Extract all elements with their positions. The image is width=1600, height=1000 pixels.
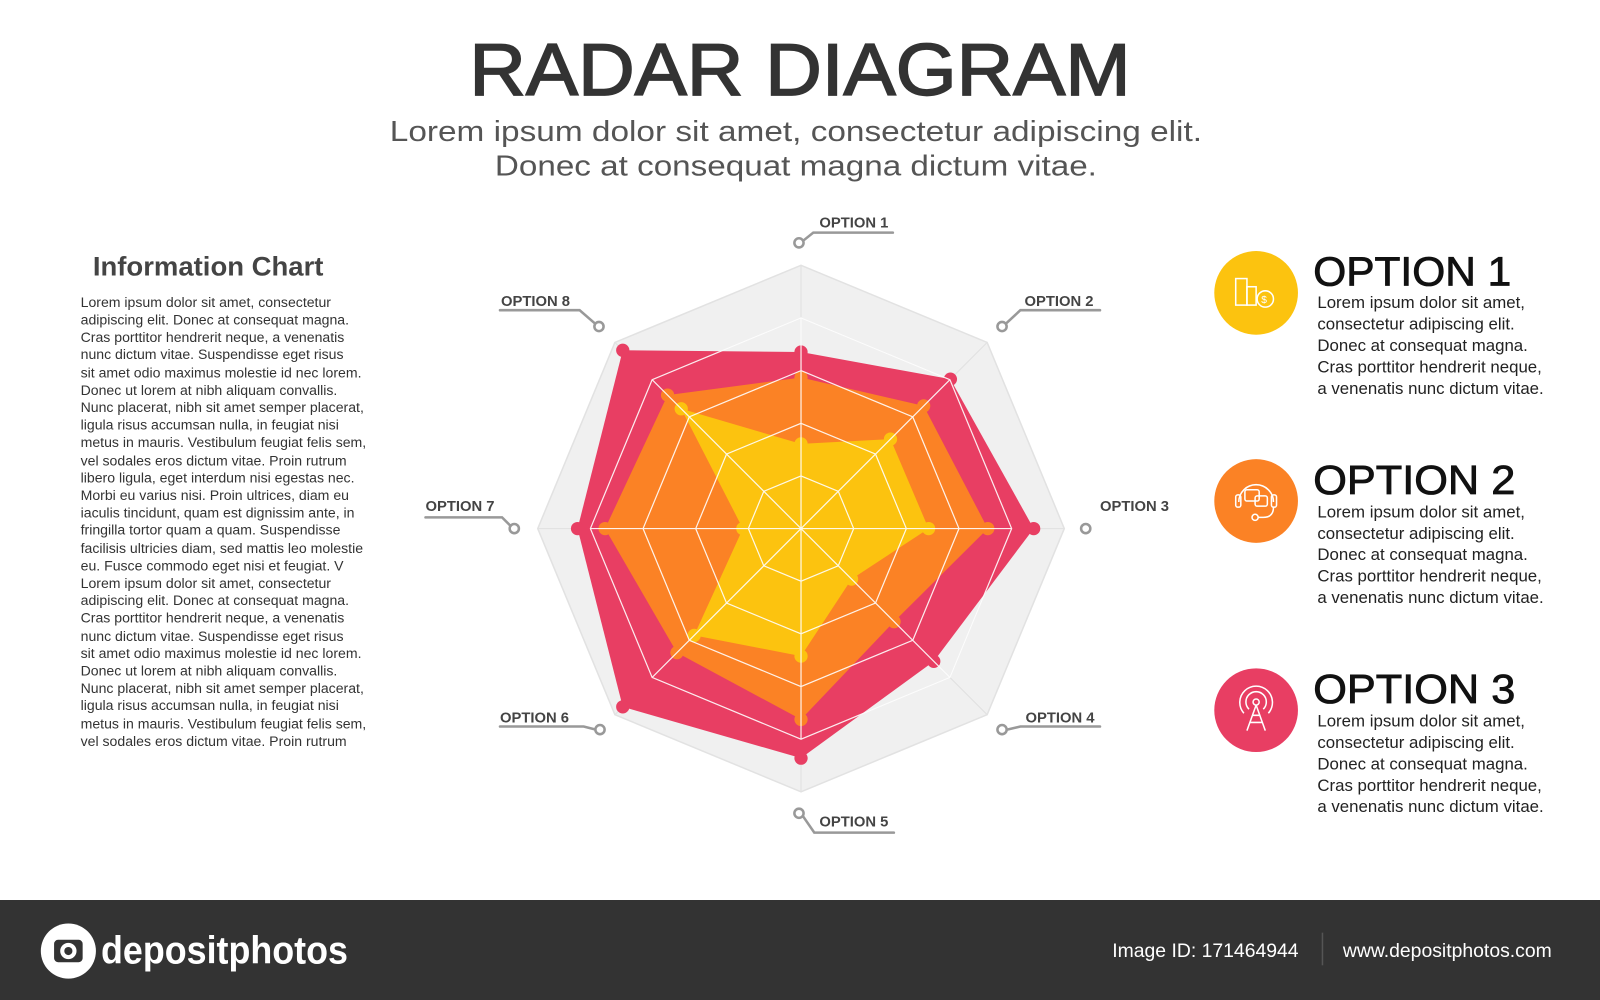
text: option 3 body: Donec at consequat magna.	[1317, 754, 1528, 773]
heading: option 3: OPTION 3	[1313, 666, 1515, 712]
label: option 4	[997, 710, 1100, 734]
text block: paragraph: Donec ut lorem at nibh aliquam convallis.	[81, 382, 337, 398]
text block: paragraph: Lorem ipsum dolor sit amet, consectetur	[81, 294, 331, 310]
label: option 6	[500, 710, 605, 734]
text: option 2 body: Donec at consequat magna.	[1317, 545, 1528, 564]
footer url: www.depositphotos.com	[1342, 940, 1552, 962]
text block: paragraph: facilisis ultricies diam, sed mattis leo molestie	[81, 540, 363, 556]
text block: paragraph: vel sodales eros dictum vitae. Proin rutrum	[81, 733, 347, 749]
text block: paragraph: vel sodales eros dictum vitae. Proin rutrum	[81, 452, 347, 468]
icon: buildings and coin	[1214, 251, 1298, 335]
label: option 2: OPTION 2	[1024, 294, 1093, 310]
text block: paragraph: Lorem ipsum dolor sit amet, consectetur	[81, 575, 331, 591]
panel: option 1	[1214, 249, 1544, 398]
panel: information chart	[81, 252, 366, 749]
text block: paragraph: fringilla tortor quam a quam. Suspendisse	[81, 522, 341, 538]
text block: paragraph: ligula risus accumsan nulla, in feugiat nisi	[81, 417, 339, 433]
subtitle: Donec at consequat magna dictum vitae.	[495, 151, 1097, 183]
text block: paragraph: Cras porttitor hendrerit neque, a venenatis	[81, 329, 344, 345]
footer image id: Image ID: 171464944	[1112, 940, 1299, 962]
radar chart	[538, 265, 1064, 792]
text block: paragraph	[81, 294, 366, 749]
text: option 3 body: a venenatis nunc dictum vitae.	[1317, 797, 1544, 816]
text: option 1 body: a venenatis nunc dictum vitae.	[1317, 379, 1544, 398]
series: orange	[598, 371, 994, 726]
label: option 8: OPTION 8	[501, 294, 570, 310]
text: option 3 body: Lorem ipsum dolor sit amet,	[1317, 712, 1525, 731]
label: option 2	[997, 294, 1100, 331]
text block: paragraph: eu. Fusce commodo eget nisi et feugiat. V	[81, 557, 344, 573]
label: option 1: OPTION 1	[819, 216, 888, 232]
text: option 2 body: Lorem ipsum dolor sit amet,	[1317, 502, 1525, 521]
label: option 3	[1081, 499, 1169, 533]
text block: paragraph: Cras porttitor hendrerit neque, a venenatis	[81, 609, 344, 625]
text block: paragraph: adipiscing elit. Donec at consequat magna.	[81, 592, 349, 608]
text: option 1 body: Cras porttitor hendrerit neque,	[1317, 357, 1542, 376]
heading: information chart: Information Chart	[93, 252, 324, 282]
subtitle	[390, 116, 1202, 183]
series: yellow	[675, 402, 935, 663]
icon: headset chat	[1214, 459, 1298, 543]
panel: option 2	[1214, 457, 1544, 607]
label: option 8	[500, 294, 604, 331]
text block: paragraph: Morbi eu varius nisi. Proin ultrices, diam eu	[81, 487, 349, 503]
text block: paragraph: nunc dictum vitae. Suspendisse eget risus	[81, 346, 344, 362]
icon: camera logo	[41, 923, 96, 979]
subtitle: Lorem ipsum dolor sit amet, consectetur adipiscing elit.	[390, 116, 1202, 148]
title: RADAR DIAGRAM	[469, 28, 1131, 111]
text: option 2 body: Cras porttitor hendrerit neque,	[1317, 567, 1542, 586]
label: option 6: OPTION 6	[500, 710, 569, 726]
outer grid background	[538, 265, 1064, 792]
text: option 2 body: a venenatis nunc dictum vitae.	[1317, 588, 1544, 607]
label: option 7	[426, 499, 519, 533]
label: option 3: OPTION 3	[1100, 499, 1169, 515]
text block: paragraph: Donec ut lorem at nibh aliquam convallis.	[81, 663, 337, 679]
heading: option 2: OPTION 2	[1313, 457, 1515, 503]
text block: paragraph: Nunc placerat, nibh sit amet semper placerat,	[81, 399, 364, 415]
text: option 3 body: consectetur adipiscing elit.	[1317, 733, 1515, 752]
icon: antenna tower	[1214, 668, 1298, 752]
label: option 1	[794, 216, 893, 247]
text block: paragraph: metus in mauris. Vestibulum feugiat felis sem,	[81, 434, 366, 450]
text: option 1 body	[1317, 293, 1544, 398]
text: option 1 body: Donec at consequat magna.	[1317, 336, 1528, 355]
text: option 2 body	[1317, 502, 1544, 607]
label: option 4: OPTION 4	[1026, 710, 1095, 726]
text: option 1 body: consectetur adipiscing elit.	[1317, 315, 1515, 334]
label: option 5: OPTION 5	[819, 815, 888, 831]
icon: buildings and coin: $	[1261, 295, 1267, 306]
text block: paragraph: metus in mauris. Vestibulum feugiat felis sem,	[81, 716, 366, 732]
footer bar	[0, 900, 1600, 1000]
axis labels	[426, 216, 1169, 833]
text block: paragraph: ligula risus accumsan nulla, in feugiat nisi	[81, 697, 339, 713]
label: option 7: OPTION 7	[426, 499, 495, 515]
series: pink	[571, 344, 1040, 765]
text block: paragraph: sit amet odio maximus molestie id nec lorem.	[81, 645, 362, 661]
text: option 3 body: Cras porttitor hendrerit neque,	[1317, 776, 1542, 795]
text block: paragraph: sit amet odio maximus molestie id nec lorem.	[81, 365, 362, 381]
text: option 3 body	[1317, 712, 1544, 816]
panel: option 3	[1214, 666, 1544, 816]
text: option 1 body: Lorem ipsum dolor sit amet,	[1317, 293, 1525, 312]
text block: paragraph: libero ligula, eget interdum nisi egestas nec.	[81, 470, 355, 486]
text block: paragraph: iaculis tincidunt, quam est dignissim ante, in	[81, 504, 355, 520]
footer logo text: depositphotos	[101, 929, 348, 972]
heading: option 1: OPTION 1	[1313, 249, 1511, 295]
text block: paragraph: nunc dictum vitae. Suspendisse eget risus	[81, 628, 344, 644]
text: option 2 body: consectetur adipiscing elit.	[1317, 524, 1515, 543]
text block: paragraph: Nunc placerat, nibh sit amet semper placerat,	[81, 680, 364, 696]
label: option 5	[794, 809, 894, 833]
text block: paragraph: adipiscing elit. Donec at consequat magna.	[81, 311, 349, 327]
